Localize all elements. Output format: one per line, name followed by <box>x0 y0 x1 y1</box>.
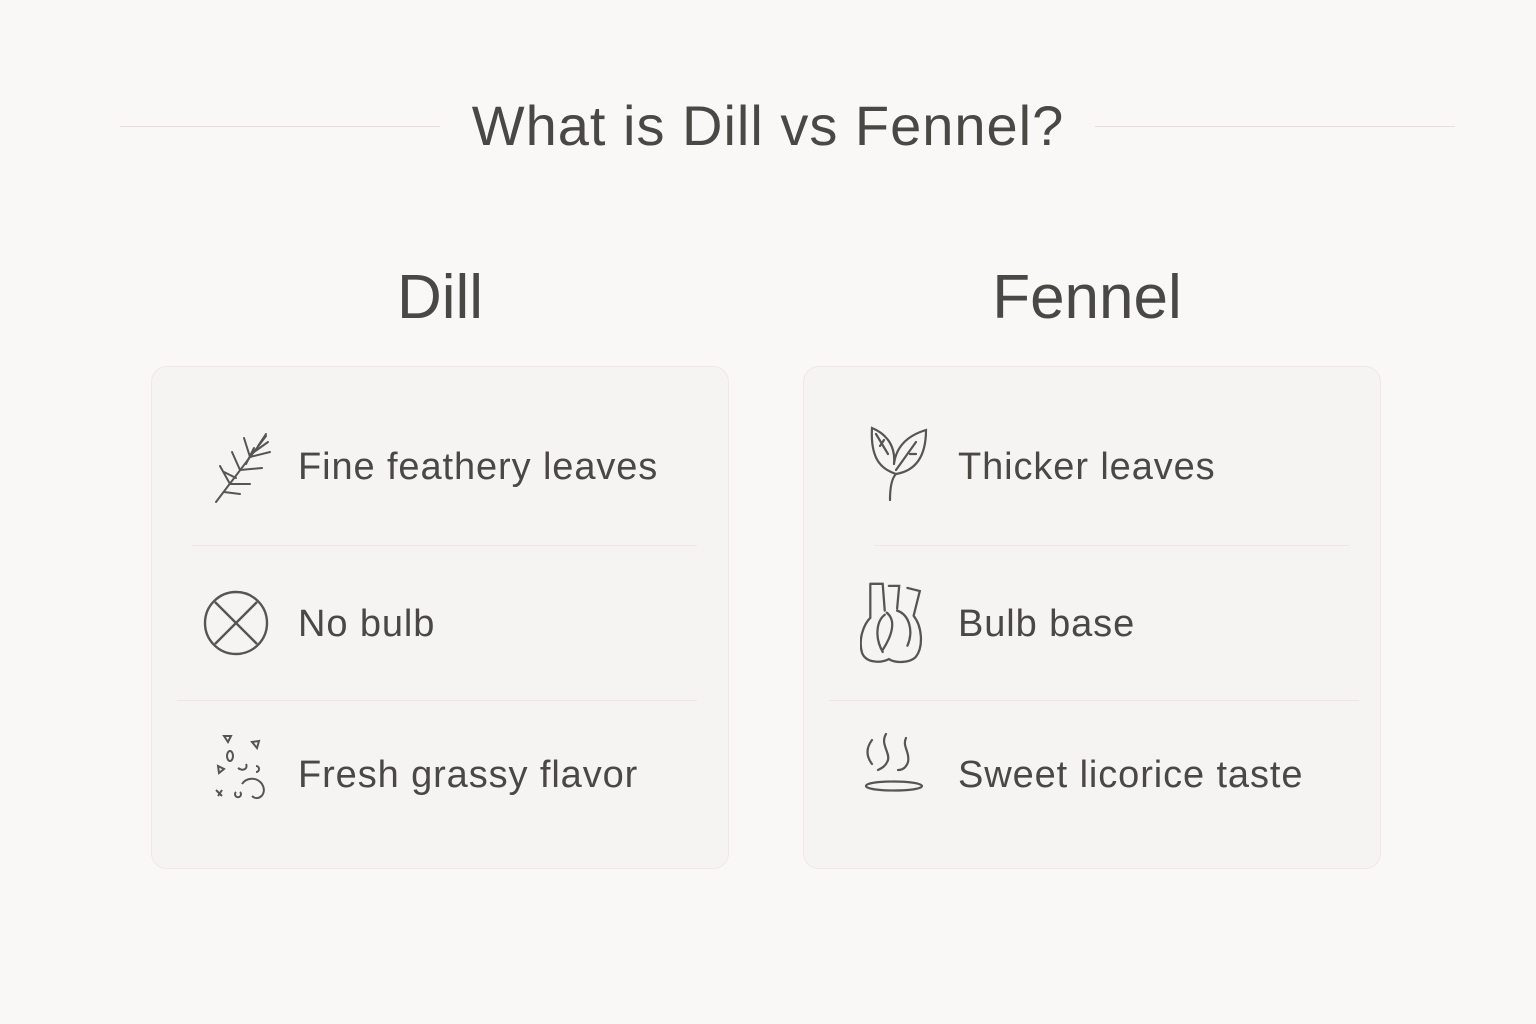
row: thicker leaves <box>870 426 1216 502</box>
panel: dill <box>151 366 729 869</box>
row: sweet licorice taste: Sweet licorice taste <box>958 754 1303 796</box>
row: bulb base <box>860 582 1135 664</box>
row: no bulb: No bulb <box>298 603 435 645</box>
panel: fennel <box>803 366 1381 869</box>
row: fine feathery leaves <box>215 433 658 503</box>
heading: Fennel: Fennel <box>992 263 1182 332</box>
row: fresh grassy flavor <box>215 735 638 800</box>
row: fresh grassy flavor: Fresh grassy flavor <box>298 754 638 796</box>
row: thicker leaves: Thicker leaves <box>958 446 1216 488</box>
row: no bulb <box>204 590 435 656</box>
row: bulb base: Bulb base <box>958 603 1135 645</box>
row: fine feathery leaves: Fine feathery leaves <box>298 446 658 488</box>
row: sweet licorice taste <box>864 732 1303 796</box>
title: What is Dill vs Fennel? <box>472 94 1064 157</box>
heading: Dill: Dill <box>397 263 483 332</box>
